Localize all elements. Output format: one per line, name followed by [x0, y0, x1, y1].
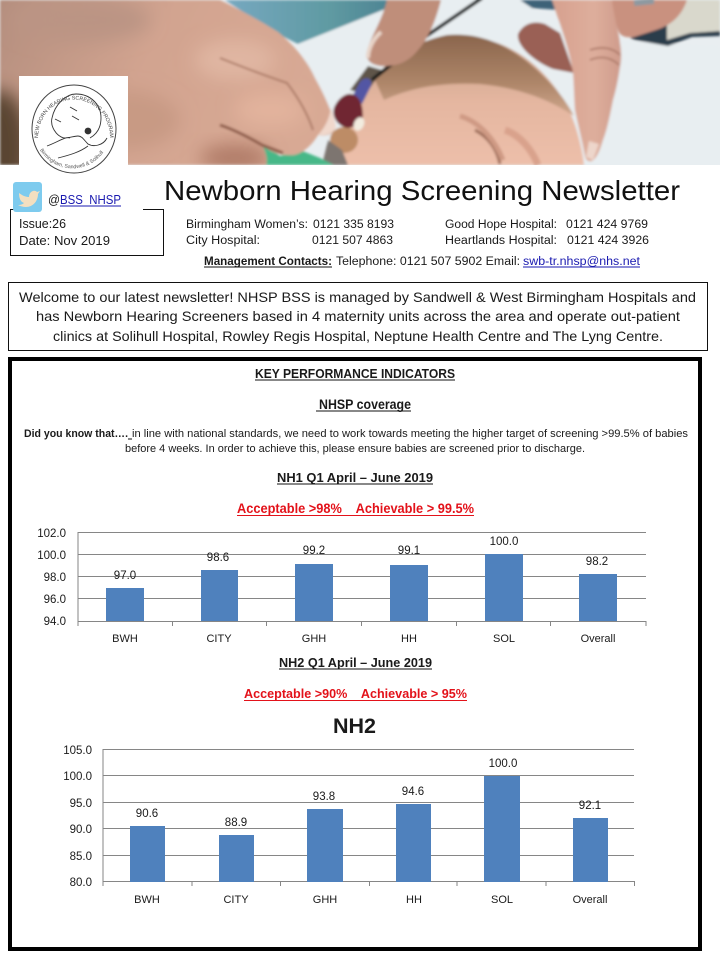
NH1 category labels	[112, 633, 615, 645]
NH1 value labels: 98.6	[207, 552, 229, 564]
NH1 category labels: GHH	[302, 633, 326, 645]
left hand shading: finger gaps	[220, 58, 313, 130]
icon: twitter	[13, 182, 42, 212]
baby ear	[330, 127, 358, 153]
welcome box	[8, 282, 708, 350]
NH2 category labels	[134, 894, 607, 906]
ring	[634, 1, 654, 3]
NH2 category labels: BWH	[134, 894, 160, 906]
twitter handle: BSS_NHSP	[60, 193, 121, 207]
NH1 value labels: 97.0	[114, 570, 136, 582]
management contacts: Management Contacts:	[204, 256, 332, 268]
logo panel: Birmingham, Sandwell & Solihull	[40, 148, 104, 168]
welcome box: Welcome to our latest newsletter! NHSP BSS is managed by Sandwell & West Birmingham Hospitals and	[19, 289, 696, 305]
did you know text	[24, 428, 688, 455]
logo ear mark	[85, 128, 91, 134]
NH1 y axis labels	[37, 528, 66, 628]
did you know text: before 4 weeks. In order to achieve this, please ensure babies are screened prior to discharge.	[125, 443, 585, 455]
welcome box: clinics at Solihull Hospital, Rowley Regis Hospital, Neptune Health Centre and The Lyng Centre.	[53, 328, 663, 344]
logo panel	[19, 76, 128, 174]
contact numbers: 0121 335 8193	[313, 219, 394, 231]
NH2 value labels: 88.9	[225, 817, 247, 829]
welcome box: has Newborn Hearing Screeners based in 4 maternity units across the area and operate out-patient	[36, 308, 680, 324]
green cloth	[262, 146, 334, 165]
management contacts	[204, 256, 641, 268]
cable	[372, 0, 482, 80]
NH1 value labels: 98.2	[586, 556, 608, 568]
photo background: teal blanket	[225, 0, 400, 44]
dark hair	[350, 66, 382, 94]
NH2 y axis labels: 85.0	[70, 851, 92, 863]
contact numbers: Good Hope Hospital:	[445, 219, 557, 231]
NH1 category labels: BWH	[112, 633, 138, 645]
NH2 value labels	[136, 758, 601, 829]
heading: NH1: NH1 Q1 April – June 2019	[277, 470, 433, 485]
contact numbers: 0121 424 9769	[566, 219, 648, 231]
NH2 value labels: 100.0	[489, 758, 517, 770]
baby eye crease	[475, 130, 500, 164]
NH1 targets: Acceptable >98% Achievable > 99.5%	[237, 501, 474, 516]
curled finger	[518, 22, 574, 73]
NH1 category labels: Overall	[581, 633, 615, 645]
chart title: NH2: NH2	[333, 715, 376, 738]
NH2 category labels: Overall	[573, 894, 607, 906]
contact numbers: Birmingham Women’s:	[186, 219, 308, 231]
NH1 value labels: 99.1	[398, 545, 420, 557]
NH2 y axis labels: 95.0	[70, 798, 92, 810]
bar chart: NH1	[37, 528, 646, 645]
baby hair	[374, 35, 574, 116]
title: Newborn Hearing Screening Newsletter	[164, 175, 680, 206]
NH2 category labels: GHH	[313, 894, 337, 906]
NH2 value labels: 94.6	[402, 786, 424, 798]
NH2 y axis labels: 105.0	[63, 745, 92, 757]
logo baby outline	[47, 94, 107, 158]
NH2 y axis labels: 90.0	[70, 824, 92, 836]
NH2 value labels: 92.1	[579, 800, 601, 812]
header photo: hands fitting hearing probe on newborn	[0, 0, 720, 165]
NH1 value labels	[114, 536, 608, 582]
NH2 bars	[130, 776, 608, 882]
bar chart: NH2	[63, 745, 634, 906]
issue box: Date: Nov 2019	[19, 234, 110, 248]
NH2 targets: Acceptable >90% Achievable > 95%	[244, 686, 467, 701]
management contacts: swb-tr.nhsp@nhs.net	[523, 256, 641, 268]
contact numbers: 0121 507 4863	[312, 235, 393, 247]
probe white tip	[352, 116, 366, 132]
NH1 y axis labels: 100.0	[37, 550, 66, 562]
did you know text: Did you know that….	[24, 428, 128, 440]
photo background: navy strip	[515, 0, 560, 10]
NH2 category labels: CITY	[223, 894, 249, 906]
NH2 value labels: 90.6	[136, 808, 158, 820]
heading: NHSP coverage: NHSP coverage	[319, 397, 411, 412]
ring and little fingers	[608, 0, 687, 37]
NH1 category labels: CITY	[206, 633, 232, 645]
NH1 y axis labels: 94.0	[44, 616, 66, 628]
NH1 y axis labels: 96.0	[44, 594, 66, 606]
NH1 y axis labels: 102.0	[37, 528, 66, 540]
contact numbers	[186, 219, 649, 247]
photo background: dark strip	[630, 23, 720, 46]
NH2 y axis labels: 100.0	[63, 771, 92, 783]
left hand	[0, 0, 335, 165]
photo background: beige corner	[667, 0, 720, 43]
contact numbers: Heartlands Hospital:	[445, 235, 557, 247]
NH1 value labels: 99.2	[303, 545, 325, 557]
NH1 y axis labels: 98.0	[44, 572, 66, 584]
management contacts: Telephone: 0121 507 5902 Email:	[336, 256, 520, 268]
NH1 category labels: SOL	[493, 633, 515, 645]
long finger	[552, 0, 621, 161]
probe red part	[333, 94, 363, 128]
thumb	[367, 0, 441, 66]
NH1 value labels: 100.0	[490, 536, 518, 548]
issue box: Issue:26	[19, 217, 66, 231]
heading: KPI: KEY PERFORMANCE INDICATORS	[255, 367, 455, 381]
NH1 bars	[106, 554, 617, 621]
NH1 category labels: HH	[401, 633, 417, 645]
NH2 category labels: HH	[406, 894, 422, 906]
NH2 y axis labels	[63, 745, 92, 889]
panel: key performance indicators	[10, 359, 700, 949]
twitter handle: @	[48, 193, 60, 207]
did you know text: in line with national standards, we need to work towards meeting the higher target of screening >99.5% of babies	[132, 428, 688, 440]
NH2 y axis labels: 80.0	[70, 877, 92, 889]
photo background: white towel	[298, 0, 682, 143]
NH2 value labels: 93.8	[313, 791, 335, 803]
baby head	[340, 37, 584, 165]
heading: NH2: NH2 Q1 April – June 2019	[279, 655, 432, 670]
left hand tonal shading	[0, 4, 292, 165]
NH2 category labels: SOL	[491, 894, 513, 906]
probe blue part	[352, 79, 371, 104]
logo ring	[32, 85, 116, 173]
issue box	[10, 210, 164, 256]
contact numbers: 0121 424 3926	[567, 235, 649, 247]
contact numbers: City Hospital:	[186, 235, 260, 247]
